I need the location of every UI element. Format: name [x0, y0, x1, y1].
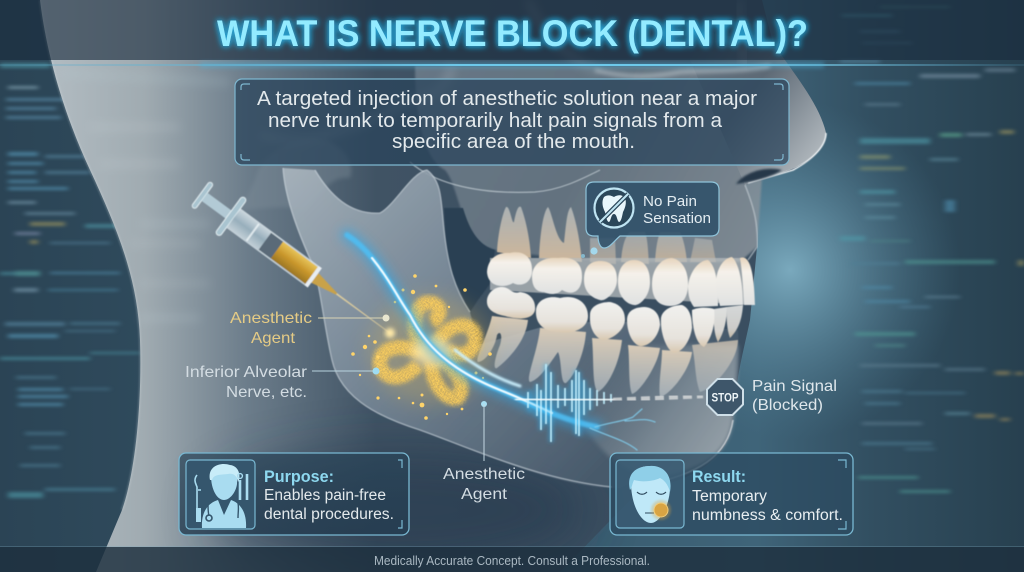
callout: no pain sensation: No Pain: [643, 194, 697, 210]
label: pain signal blocked: (Blocked): [752, 397, 823, 414]
label: inferior alveolar nerve: Inferior Alveolar: [185, 364, 308, 381]
label: pain signal blocked: Pain Signal: [752, 378, 837, 395]
label: inferior alveolar nerve: Nerve, etc.: [226, 384, 307, 401]
blocked signal dashes: [613, 396, 703, 400]
label: pain signal blocked: [752, 378, 837, 414]
pain signal waveform: [515, 364, 615, 442]
result text: [692, 468, 843, 524]
header band: [0, 0, 1024, 68]
icon: dentist: [186, 460, 255, 529]
purpose text: Purpose:: [264, 468, 334, 486]
mandible: [283, 168, 738, 488]
label: anesthetic agent gold: Anesthetic: [230, 310, 312, 327]
title: WHAT IS NERVE BLOCK (DENTAL)?: [217, 13, 808, 54]
label: anesthetic agent gold: [230, 310, 390, 347]
panel: result: [610, 453, 853, 535]
definition text: [257, 87, 757, 153]
lower teeth: [477, 287, 743, 397]
label: anesthetic agent gold: Agent: [251, 330, 296, 347]
stop sign icon: [707, 379, 743, 415]
definition text: A targeted injection of anesthetic solution near a major: [257, 87, 757, 110]
anesthetic particle cloud: [351, 274, 492, 420]
purpose text: Enables pain-free: [264, 487, 386, 504]
nerve: glowing blue path: [347, 235, 655, 450]
label: anesthetic agent lower: [443, 401, 525, 503]
label: anesthetic agent lower: Anesthetic: [443, 466, 525, 483]
upper teeth: [487, 207, 755, 307]
purpose text: [264, 468, 394, 523]
syringe: [187, 175, 403, 351]
background: blurred code lines right: [840, 6, 1024, 493]
stop sign icon: STOP: [712, 392, 739, 404]
footer band: Medically Accurate Concept. Consult a Professional.: [374, 554, 650, 568]
panel: definition: [235, 79, 789, 165]
icon: crossed-out tooth: [594, 188, 634, 228]
purpose text: dental procedures.: [264, 506, 394, 523]
callout: no pain sensation: Sensation: [643, 211, 711, 227]
panel: purpose: [179, 453, 409, 535]
background: blurred code lines left: [0, 63, 140, 498]
dark cavity between jaws: [444, 208, 495, 312]
label: inferior alveolar nerve: [185, 364, 380, 401]
definition text: nerve trunk to temporarily halt pain signals from a: [268, 109, 723, 132]
label: anesthetic agent lower: Agent: [461, 486, 508, 503]
result text: Result:: [692, 468, 746, 486]
icon: numb face: [616, 460, 684, 528]
skull: upper jaw and nose bones: [260, 0, 826, 262]
injection point glow: [385, 328, 395, 338]
streaks over head: [60, 71, 230, 320]
result text: Temporary: [692, 488, 767, 505]
result text: numbness & comfort.: [692, 507, 843, 524]
head silhouette: [40, 0, 826, 572]
callout: no pain sensation: [581, 182, 719, 258]
footer band: [0, 546, 1024, 572]
skull: cheekbone: [240, 139, 351, 210]
definition text: specific area of the mouth.: [392, 130, 635, 153]
